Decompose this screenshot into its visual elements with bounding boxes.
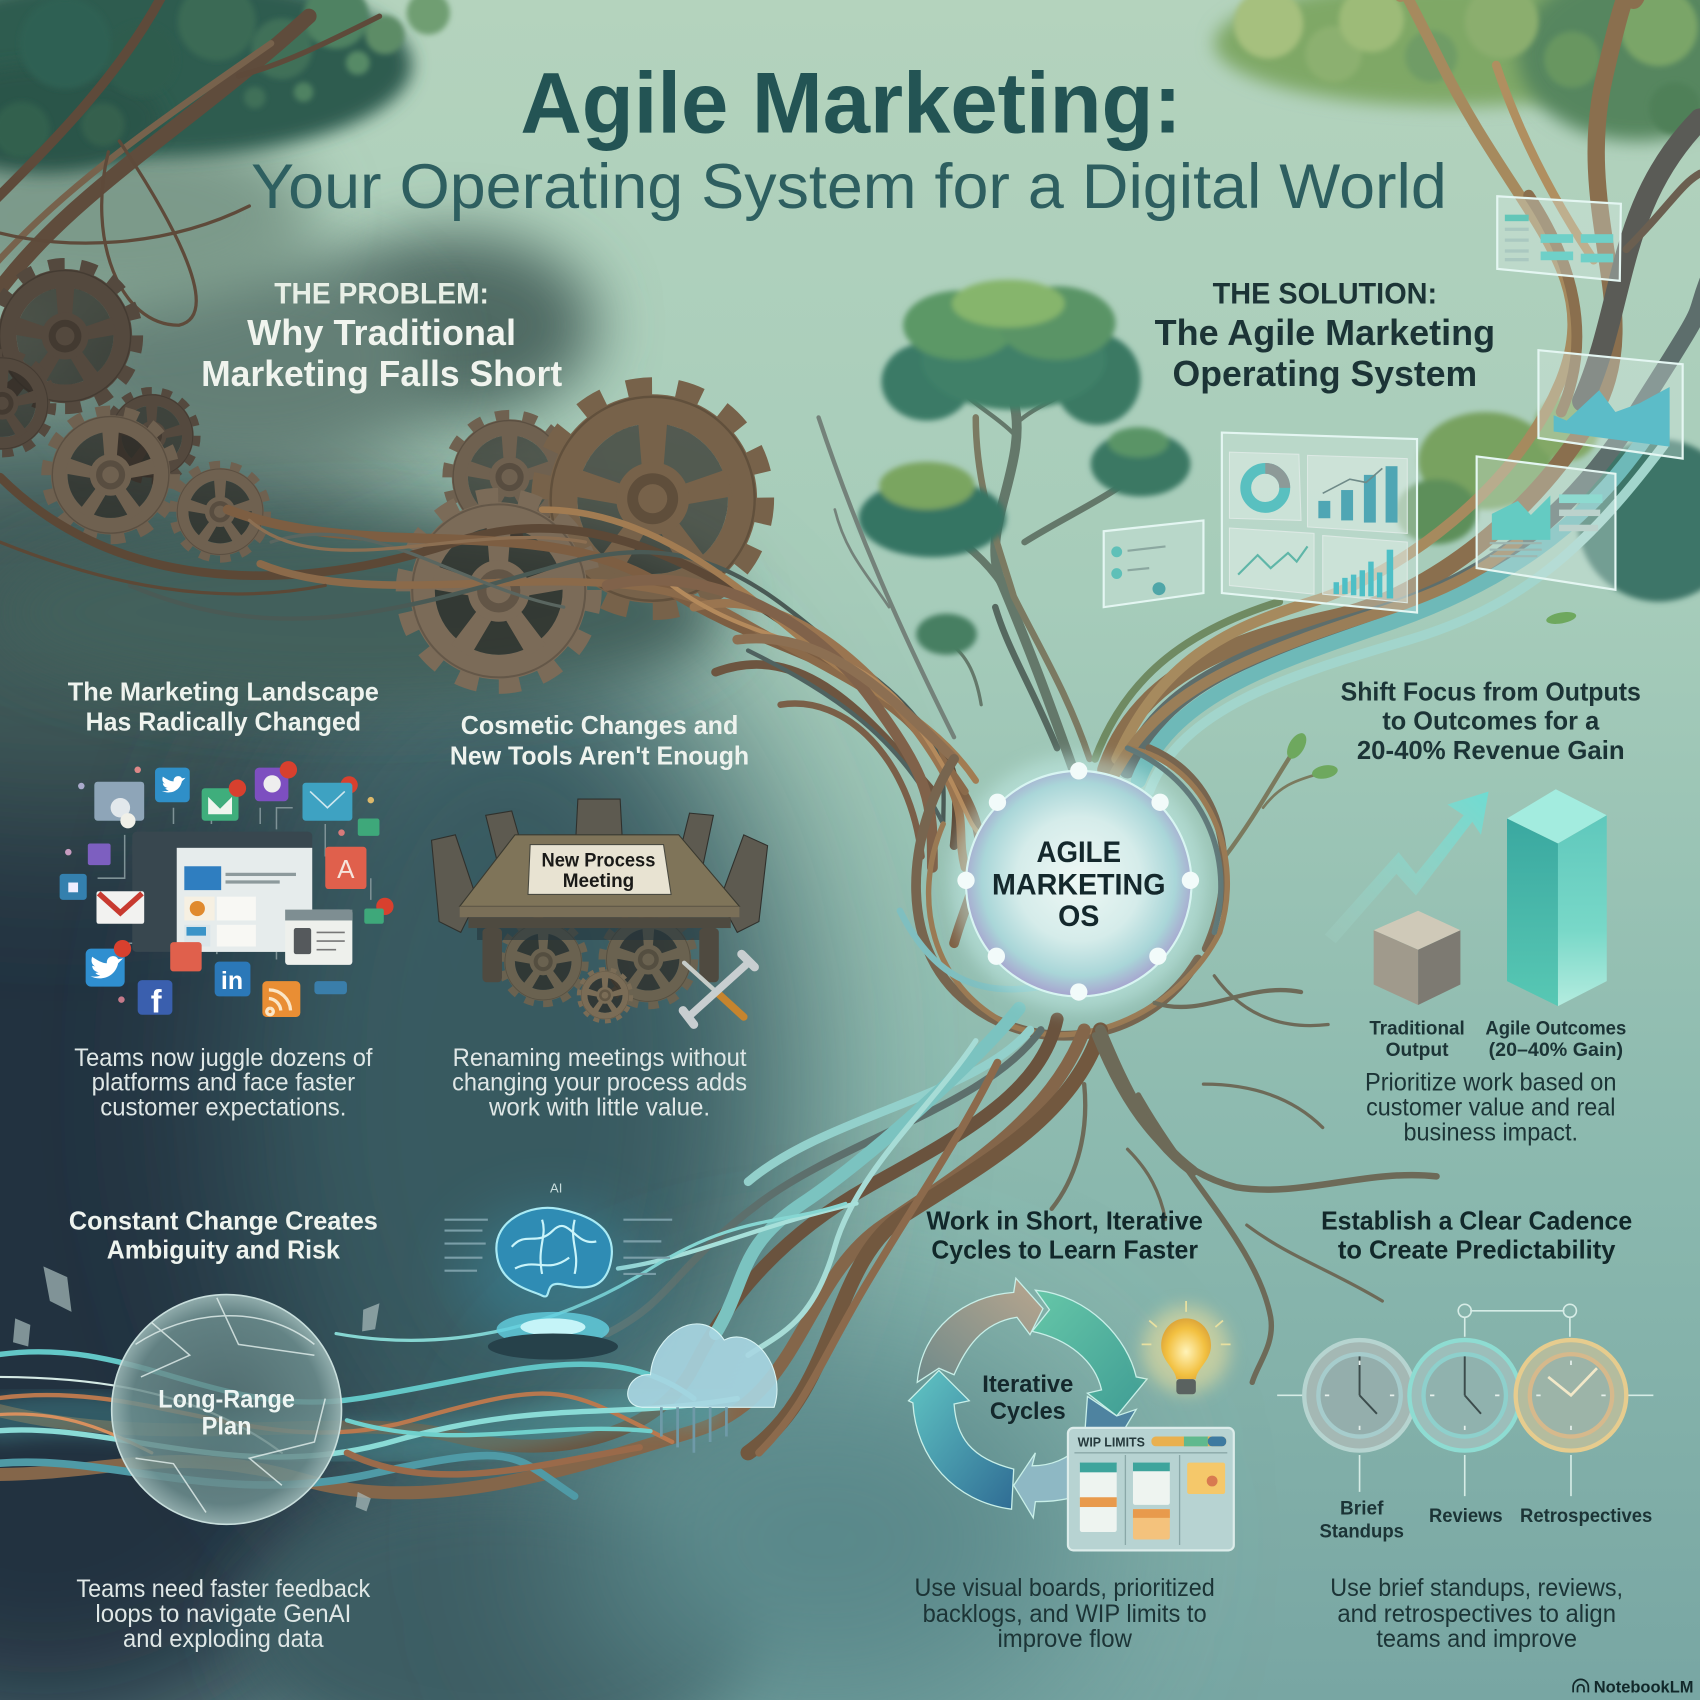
body text: improve flow (997, 1625, 1133, 1653)
clock labels: Retrospectives (1520, 1505, 1652, 1527)
panel: main dashboard (1222, 433, 1417, 613)
floating dashboard panels (1104, 196, 1683, 613)
heading: the problem (201, 279, 562, 394)
heading (450, 710, 749, 770)
body text (1365, 1069, 1617, 1147)
label: iterative cycles: Iterative (982, 1371, 1073, 1398)
icon: light bulb (1142, 1301, 1231, 1394)
central orb: Agile Marketing OS (951, 756, 1207, 1012)
heading: Has Radically Changed (86, 707, 361, 737)
section: outputs to outcomes (1325, 676, 1641, 1147)
icon cluster: platforms (60, 761, 394, 1020)
body text: Teams need faster feedback (76, 1575, 371, 1603)
small tree at centre (859, 280, 1190, 770)
icon: clock standups (1304, 1340, 1415, 1451)
watermark: NotebookLM: NotebookLM (1594, 1678, 1693, 1696)
heading (69, 1205, 378, 1265)
panel: WIP limits board (1068, 1428, 1234, 1550)
body text (1330, 1574, 1623, 1653)
body text: loops to navigate GenAI (95, 1600, 351, 1628)
clock labels: Standups (1319, 1520, 1404, 1542)
heading: the solution: Operating System (1173, 354, 1477, 394)
top-left tree branches (0, 0, 379, 325)
heading: 20-40% Revenue Gain (1357, 735, 1625, 765)
section: iterative cycles (909, 1205, 1234, 1653)
icon: clock reviews (1409, 1340, 1520, 1451)
body text: backlogs, and WIP limits to (923, 1600, 1207, 1628)
label: iterative cycles (982, 1371, 1073, 1425)
chart: agile outcomes bar (1507, 789, 1607, 1006)
chart labels (1369, 1017, 1626, 1061)
title line 2: Your Operating System for a Digital World (251, 152, 1447, 222)
heading: Constant Change Creates (69, 1205, 378, 1235)
chart labels: Agile Outcomes (1485, 1017, 1626, 1039)
heading: to Create Predictability (1338, 1235, 1616, 1265)
body text: customer expectations. (100, 1094, 346, 1122)
lower trunk flowing to bottom left (0, 1008, 1100, 1493)
illustration: cracked glass sphere (112, 1295, 342, 1524)
body text: customer value and real (1366, 1094, 1615, 1122)
orb label: AGILE (1036, 837, 1121, 869)
icon: AI brain hologram (445, 1181, 672, 1360)
heading: Work in Short, Iterative (926, 1205, 1203, 1235)
icon cluster: platforms: A (337, 854, 355, 884)
orb label: OS (1058, 901, 1099, 933)
body text: and exploding data (123, 1625, 324, 1653)
body text: Use brief standups, reviews, (1330, 1574, 1623, 1602)
heading: the problem: THE PROBLEM: (274, 279, 489, 311)
illustration: meeting table over gears (432, 799, 768, 1025)
body text (76, 1575, 371, 1653)
tangled branches from gears to orb (0, 477, 981, 943)
body text: Teams now juggle dozens of (74, 1044, 372, 1072)
panel: small left dashboard (1104, 520, 1203, 607)
chart: traditional output cube (1374, 911, 1460, 1005)
icon: wrench and screwdriver (683, 954, 755, 1025)
heading (1341, 676, 1641, 765)
body text: business impact. (1403, 1119, 1578, 1147)
section: cosmetic changes (432, 710, 768, 1122)
heading: Establish a Clear Cadence (1321, 1205, 1632, 1235)
heading: the solution: THE SOLUTION: (1213, 279, 1437, 311)
body text: Prioritize work based on (1365, 1069, 1617, 1097)
heading: the solution: The Agile Marketing (1155, 313, 1495, 353)
panel: WIP limits board: WIP LIMITS (1078, 1435, 1145, 1449)
top-right tree canopy (1214, 0, 1700, 141)
data streams across bottom left (0, 1203, 846, 1496)
icon: clock retrospectives (1516, 1340, 1626, 1451)
heading (926, 1205, 1203, 1265)
tree trunks (932, 374, 1138, 770)
body text: work with little value. (488, 1094, 710, 1122)
icon: cycle arrows (909, 1278, 1147, 1518)
heading: Cosmetic Changes and (461, 710, 738, 740)
right trunk rising to top right (1095, 0, 1700, 791)
background: dark left haze (0, 119, 1084, 1700)
orb sphere (966, 771, 1192, 996)
heading: the problem: Marketing Falls Short (201, 354, 562, 394)
panel: lower dashboard (1477, 456, 1615, 590)
body text: Use visual boards, prioritized (915, 1574, 1215, 1602)
tree canopy (859, 280, 1190, 655)
body text: Renaming meetings without (453, 1044, 747, 1072)
clock labels (1319, 1498, 1652, 1542)
sign: New Process Meeting: Meeting (563, 870, 634, 892)
chart labels: (20–40% Gain) (1489, 1039, 1623, 1061)
heading: New Tools Aren't Enough (450, 740, 749, 770)
label: iterative cycles: Cycles (990, 1398, 1066, 1425)
heading (1321, 1205, 1632, 1265)
title (251, 54, 1447, 222)
icon: data cloud (628, 1324, 777, 1453)
panel: top right dashboard (1497, 196, 1621, 281)
section: clear cadence (1277, 1205, 1653, 1653)
icon: timeline nodes (1458, 1304, 1576, 1317)
heading: Ambiguity and Risk (107, 1235, 340, 1265)
heading: the problem: Why Traditional (247, 313, 516, 353)
right moss and foliage (1395, 396, 1700, 602)
body text (915, 1574, 1215, 1653)
illustration: cracked glass sphere: Long-Range (158, 1385, 295, 1413)
body text: teams and improve (1376, 1625, 1577, 1653)
section: constant change (69, 1181, 777, 1653)
orb label (992, 837, 1165, 933)
orb label: MARKETING (992, 869, 1165, 901)
section: marketing landscape (60, 676, 394, 1122)
roots at lower right (1052, 976, 1437, 1382)
panel: area chart dashboard (1538, 350, 1683, 459)
sign: New Process Meeting (528, 845, 671, 894)
chart labels: Output (1386, 1039, 1449, 1061)
icon: AI brain hologram: AI (550, 1181, 562, 1196)
timeline connectors (1277, 1311, 1653, 1496)
gears: rusted machinery (0, 264, 764, 686)
orb wrapping branches (900, 748, 1227, 1036)
clock labels: Reviews (1429, 1505, 1503, 1527)
heading: Shift Focus from Outputs (1341, 676, 1641, 706)
heading: to Outcomes for a (1382, 706, 1600, 736)
title line 1: Agile Marketing: (520, 54, 1182, 151)
heading: Cycles to Learn Faster (931, 1235, 1198, 1265)
heading (68, 676, 379, 737)
orb nodes (957, 762, 1199, 1001)
icon cluster: platforms: f (151, 984, 162, 1020)
sign: New Process Meeting: New Process (542, 849, 656, 871)
chart: rising arrow (1325, 791, 1489, 943)
heading: the solution (1155, 279, 1495, 394)
body text: platforms and face faster (92, 1069, 355, 1097)
paper fragments (13, 1266, 379, 1511)
body text: and retrospectives to align (1337, 1600, 1616, 1628)
orb glow (951, 756, 1207, 1012)
top-left tree canopy (0, 0, 450, 173)
icon: leaves on branch (1283, 610, 1577, 781)
illustration: cracked glass sphere: Plan (202, 1412, 252, 1440)
body text (74, 1044, 372, 1122)
clock labels: Brief (1340, 1498, 1384, 1520)
heading: The Marketing Landscape (68, 676, 379, 706)
body text (452, 1044, 747, 1122)
thin bare branches (819, 417, 1314, 857)
icon cluster: platforms: in (221, 967, 243, 995)
body text: changing your process adds (452, 1069, 747, 1097)
chart labels: Traditional (1369, 1017, 1465, 1039)
